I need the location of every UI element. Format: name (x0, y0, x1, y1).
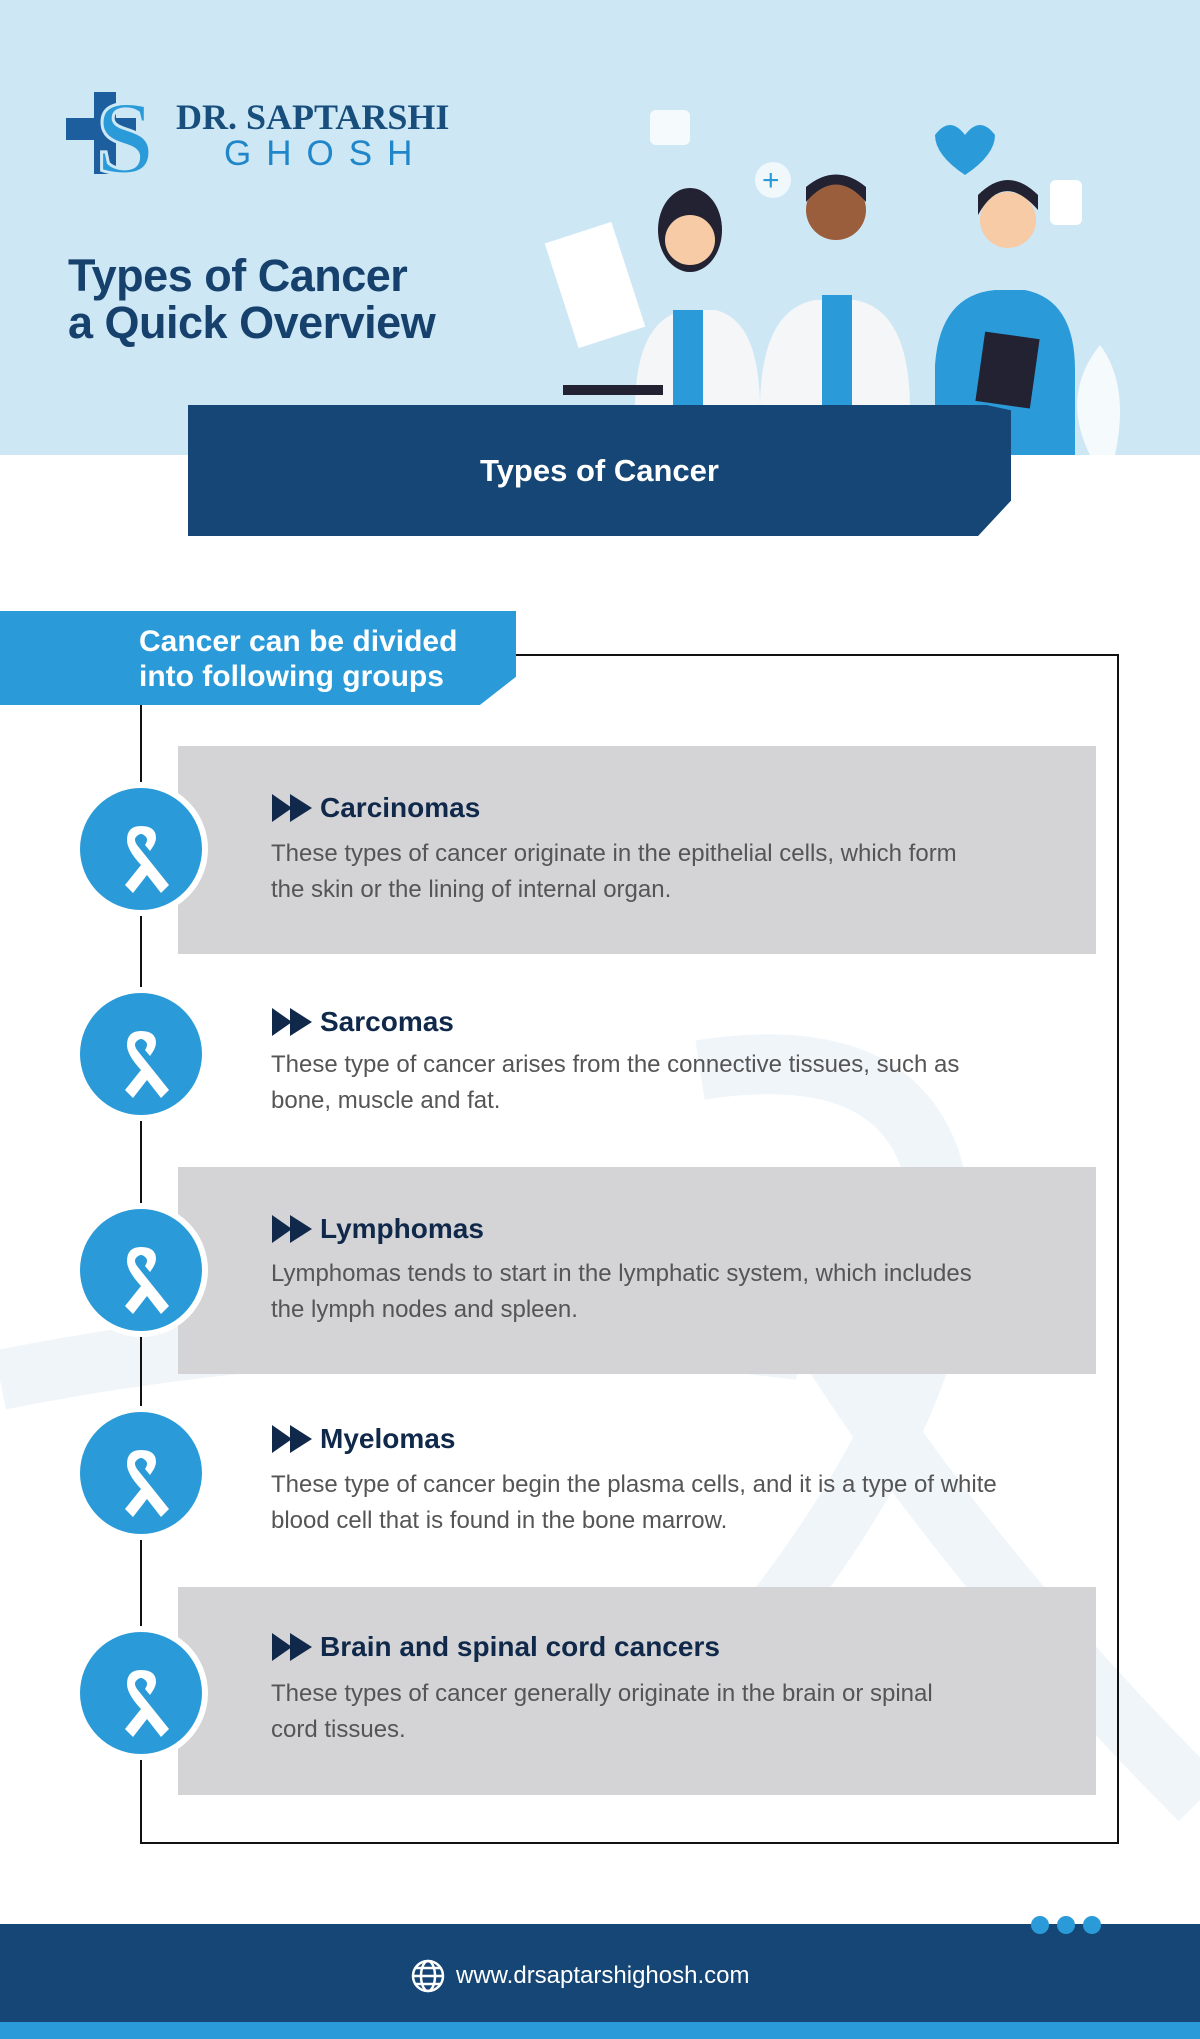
title: Types of Cancer (68, 250, 407, 301)
text: the lymph nodes and spleen. (271, 1296, 578, 1323)
footer (0, 1924, 1200, 2039)
item: Brain and spinal cord: Brain and spinal cord cancers (320, 1631, 720, 1662)
faint background ribbon (0, 1034, 1200, 1821)
title: a Quick Overview (68, 297, 435, 348)
text: Lymphomas tends to start in the lymphatic system, which includes (271, 1260, 972, 1287)
logo: DR. SAPTARSHI (176, 97, 449, 137)
label: groups (0, 611, 516, 705)
logo: GHOSH (224, 134, 427, 173)
title (68, 250, 436, 348)
gray boxes (178, 746, 1096, 954)
doctors illustration (544, 110, 1120, 455)
text: cord tissues. (271, 1716, 406, 1743)
label: groups: into following groups (139, 660, 444, 693)
item: Lymphomas: Lymphomas (320, 1213, 484, 1244)
banner: Types of Cancer: Types of Cancer (480, 452, 719, 488)
ribbon icons (74, 782, 208, 916)
header background (0, 0, 1200, 455)
banner: Types of Cancer (188, 405, 1011, 536)
text: blood cell that is found in the bone marrow. (271, 1507, 727, 1534)
text: These type of cancer begin the plasma cells, and it is a type of white (271, 1471, 997, 1498)
text: These type of cancer arises from the connective tissues, such as (271, 1051, 959, 1078)
frame (140, 654, 1119, 1844)
website: www.drsaptarshighosh.com (456, 1962, 749, 1989)
item: Myelomas: Myelomas (320, 1423, 455, 1454)
label: groups: Cancer can be divided (139, 625, 457, 658)
dots (1031, 1916, 1101, 1934)
text: These types of cancer generally originate in the brain or spinal (271, 1680, 933, 1707)
logo (66, 90, 449, 180)
text: These types of cancer originate in the epithelial cells, which form (271, 840, 957, 867)
text: bone, muscle and fat. (271, 1087, 500, 1114)
text: the skin or the lining of internal organ. (271, 876, 671, 903)
doctors illustration: + (762, 164, 780, 197)
item: Carcinomas: Carcinomas (320, 792, 480, 823)
item: Sarcomas: Sarcomas (320, 1006, 454, 1037)
